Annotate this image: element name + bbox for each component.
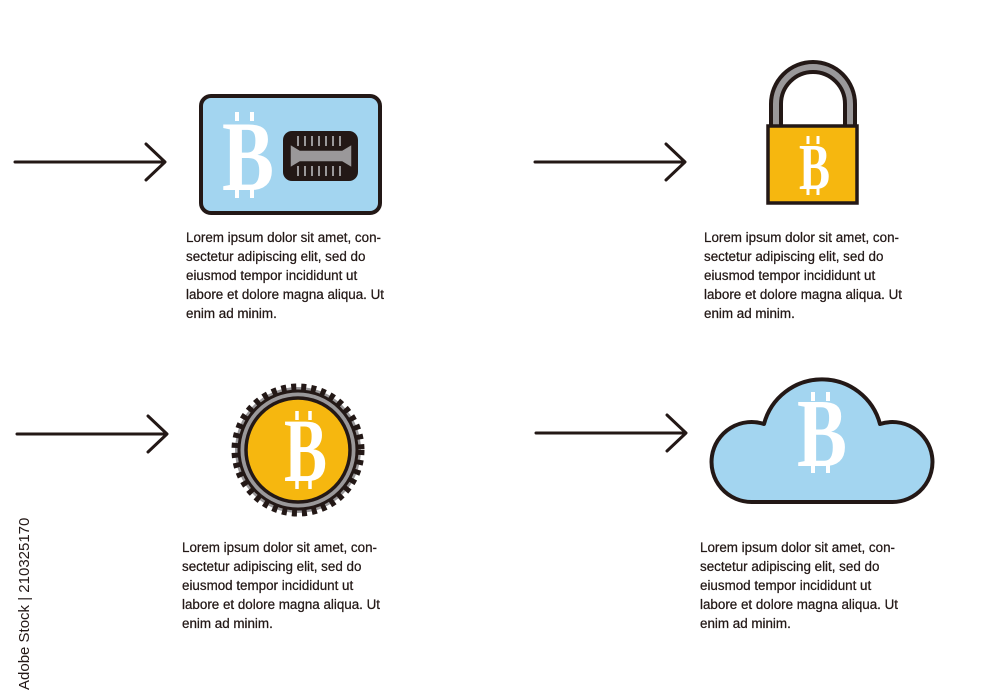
text block: bottom-left: enim ad minim. — [182, 616, 273, 631]
text block: top-left: labore et dolore magna aliqua. Ut — [186, 287, 384, 302]
text block: bottom-left: sectetur adipiscing elit, sed do — [182, 559, 361, 574]
text block: bottom-right: labore et dolore magna aliqua. Ut — [700, 597, 898, 612]
arrow: top-left — [15, 144, 165, 180]
icon: bitcoin coin badge — [235, 387, 361, 513]
icon: bitcoin cloud — [712, 379, 932, 502]
text block: bottom-right — [700, 540, 898, 631]
icon: bitcoin card: B — [222, 101, 274, 212]
text block: top-left: Lorem ipsum dolor sit amet, con- — [186, 230, 381, 245]
icon: bitcoin coin badge: B — [284, 402, 327, 501]
text block: bottom-right: enim ad minim. — [700, 616, 791, 631]
text block: top-right: eiusmod tempor incididunt ut — [704, 268, 875, 283]
watermark: side text: Adobe Stock | 210325170 — [16, 518, 33, 690]
text block: bottom-left: eiusmod tempor incididunt ut — [182, 578, 353, 593]
text block: top-right — [704, 230, 902, 321]
icon: bitcoin card — [201, 96, 380, 213]
text block: bottom-right: eiusmod tempor incididunt ut — [700, 578, 871, 593]
text block: top-left: enim ad minim. — [186, 306, 277, 321]
arrow: bottom-left — [17, 416, 167, 452]
text block: bottom-right: Lorem ipsum dolor sit amet, con- — [700, 540, 895, 555]
icon: bitcoin cloud: B — [797, 380, 847, 488]
text block: top-right: Lorem ipsum dolor sit amet, con- — [704, 230, 899, 245]
icon: padlock: B — [799, 131, 830, 204]
arrow: top-right — [535, 144, 685, 180]
arrow: bottom-right — [536, 415, 686, 451]
text block: bottom-left — [182, 540, 380, 631]
text block: top-left — [186, 230, 384, 321]
text block: top-right: labore et dolore magna aliqua. Ut — [704, 287, 902, 302]
icon: padlock — [768, 67, 857, 204]
text block: top-left: eiusmod tempor incididunt ut — [186, 268, 357, 283]
text block: bottom-left: labore et dolore magna aliqua. Ut — [182, 597, 380, 612]
text block: top-left: sectetur adipiscing elit, sed do — [186, 249, 365, 264]
text block: top-right: sectetur adipiscing elit, sed do — [704, 249, 883, 264]
text block: bottom-left: Lorem ipsum dolor sit amet, con- — [182, 540, 377, 555]
text block: top-right: enim ad minim. — [704, 306, 795, 321]
text block: bottom-right: sectetur adipiscing elit, sed do — [700, 559, 879, 574]
